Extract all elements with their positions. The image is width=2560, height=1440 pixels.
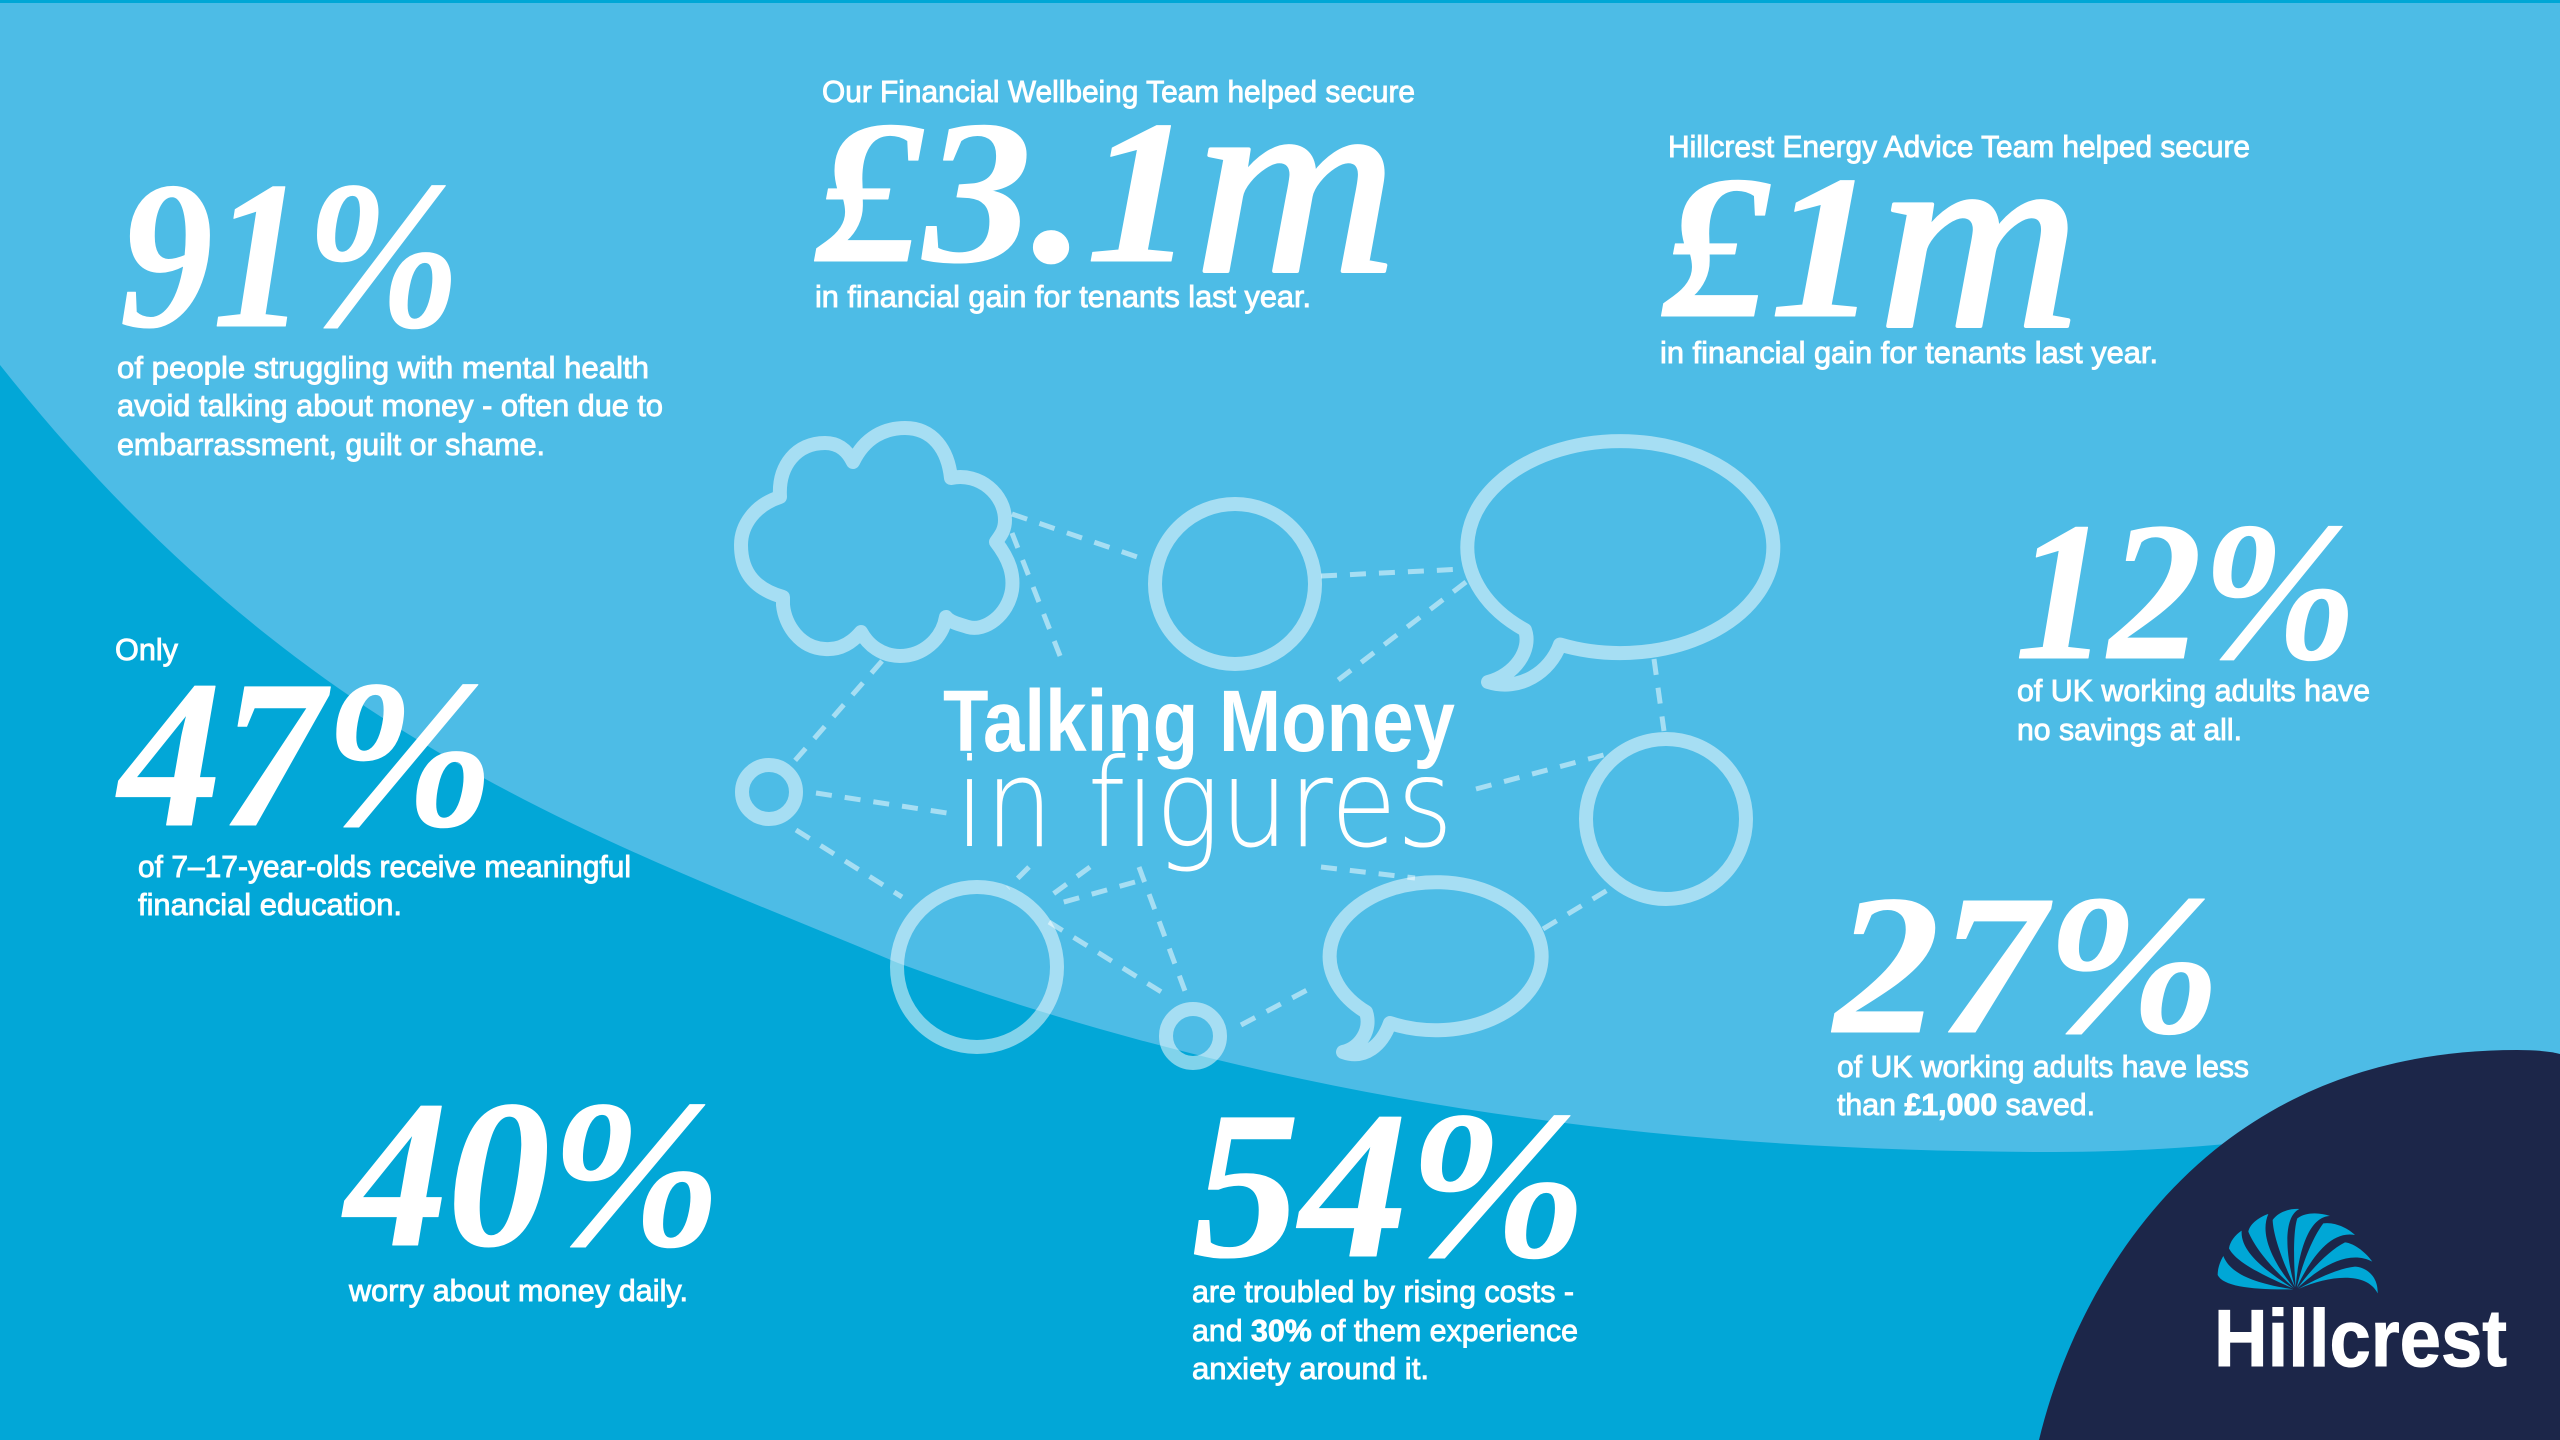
description: [138, 849, 631, 922]
title: [943, 673, 1455, 875]
big number: m: [1195, 36, 1397, 329]
icon: small speech bubble: [1330, 882, 1542, 1054]
icon: circle right: [1586, 739, 1746, 899]
big number: 47%: [115, 637, 494, 871]
icon: large speech bubble: [1467, 441, 1773, 685]
big number: 40%: [341, 1057, 721, 1291]
logo: Hillcrest: [2214, 1209, 2507, 1384]
stat: 12%: [2015, 482, 2370, 747]
dashed connectors: [792, 514, 1664, 1025]
big number: 12%: [2015, 482, 2357, 701]
network diagram: [741, 428, 1773, 1063]
stat: £1m: [1660, 91, 2250, 384]
description: than £1,000 saved.: [1837, 1087, 2095, 1122]
icon: small circle left: [742, 765, 796, 819]
description: anxiety around it.: [1192, 1351, 1429, 1386]
description: of UK working adults have less: [1837, 1049, 2249, 1084]
stat: 27%: [1831, 855, 2249, 1122]
logo panel: navy corner: [2039, 1050, 2560, 1440]
background: darker blue curved area: [0, 365, 2560, 1440]
description: [1192, 1274, 1578, 1386]
title line 1: Talking Money: [943, 673, 1455, 770]
description: financial education.: [138, 887, 402, 922]
big number: m: [1878, 91, 2080, 384]
description: in financial gain for tenants last year.: [1660, 335, 2158, 370]
description: [1837, 1049, 2249, 1122]
description: of people struggling with mental health: [117, 350, 649, 385]
icon: fan emblem: [2218, 1209, 2378, 1293]
icon: thought cloud: [741, 428, 1012, 656]
description: [2017, 673, 2370, 747]
description: of 7–17-year-olds receive meaningful: [138, 849, 631, 884]
intro line: Our Financial Wellbeing Team helped secure: [822, 74, 1415, 109]
icon: circle top: [1155, 504, 1315, 664]
stat: 91%: [117, 138, 663, 462]
icon: circle bottom left: [897, 887, 1057, 1047]
title line 2: in figures: [955, 733, 1453, 875]
description: of UK working adults have: [2017, 673, 2370, 708]
stat: 47%: [115, 632, 631, 922]
description: avoid talking about money - often due to: [117, 388, 663, 423]
big number: 91%: [120, 138, 460, 372]
stat: 54%: [1192, 1068, 1587, 1386]
big number: 54%: [1192, 1068, 1587, 1302]
big number: £3.1: [815, 79, 1174, 306]
description: [117, 350, 663, 462]
icon: small circle bottom: [1166, 1009, 1220, 1063]
top strip: [0, 0, 2560, 3]
intro line: Only: [115, 632, 178, 667]
description: are troubled by rising costs -: [1192, 1274, 1574, 1309]
description: in financial gain for tenants last year.: [815, 279, 1311, 314]
big number: 27%: [1831, 855, 2221, 1076]
description: no savings at all.: [2017, 712, 2242, 747]
description: and 30% of them experience: [1192, 1313, 1578, 1348]
intro line: Hillcrest Energy Advice Team helped secure: [1668, 129, 2250, 164]
stat: 40%: [341, 1057, 721, 1308]
wordmark: Hillcrest: [2214, 1294, 2507, 1384]
big number: £1: [1662, 134, 1867, 361]
description: embarrassment, guilt or shame.: [117, 427, 545, 462]
stat: £3.1m: [814, 36, 1415, 329]
description: worry about money daily.: [348, 1273, 688, 1308]
